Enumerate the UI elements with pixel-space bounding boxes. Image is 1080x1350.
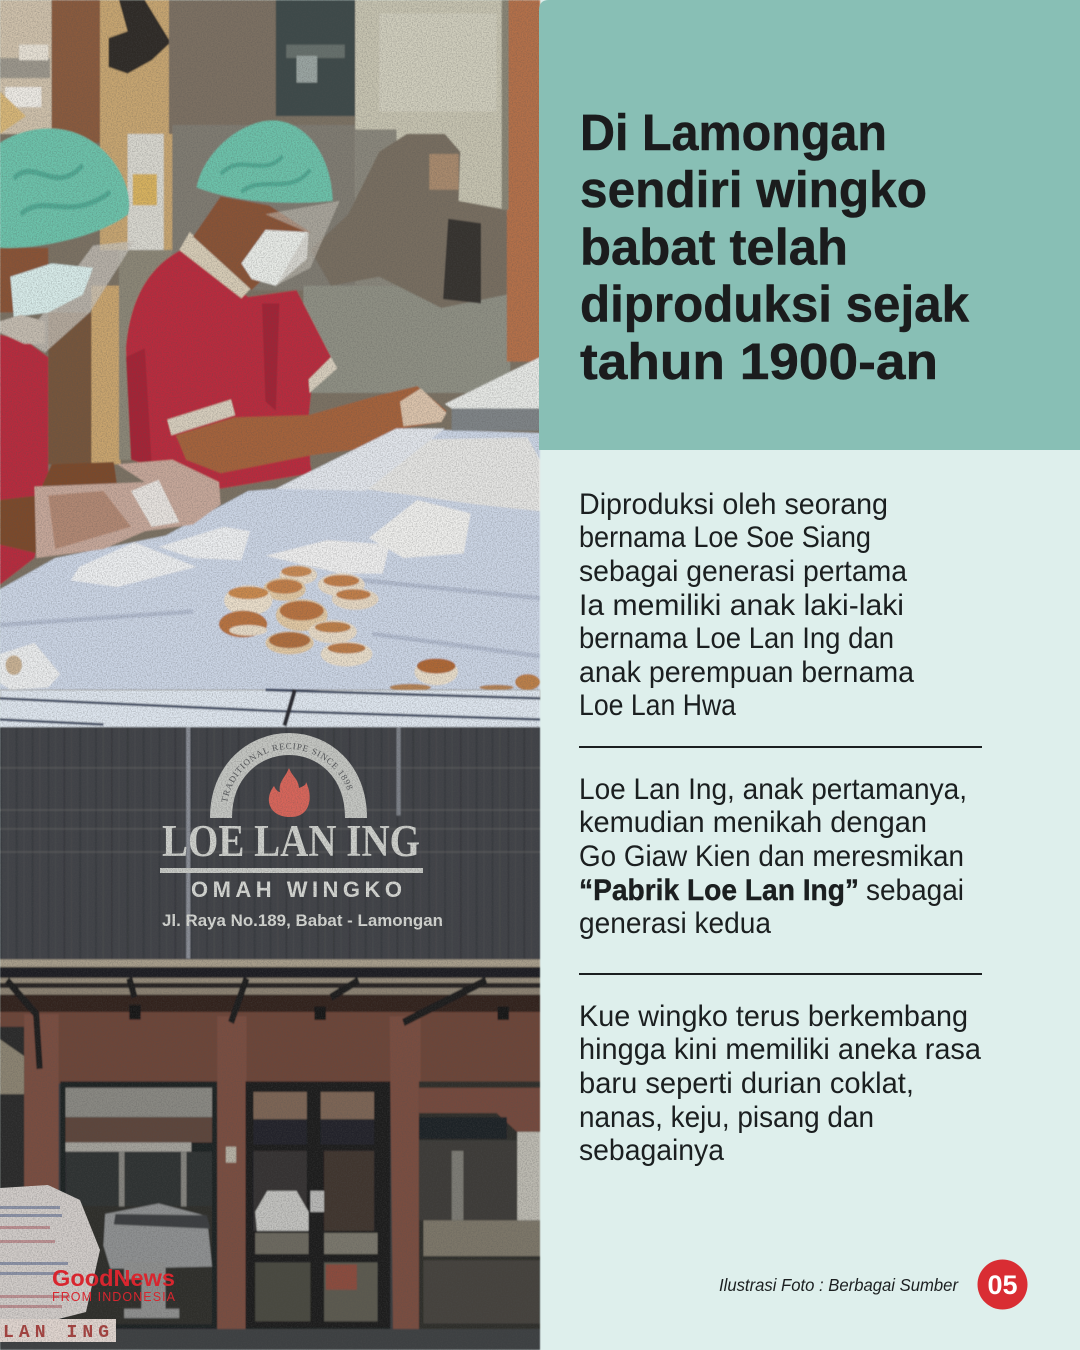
photo credit: Ilustrasi Foto : Berbagai Sumber bbox=[719, 1275, 959, 1295]
text block: first generation: Ia memiliki anak laki-laki bbox=[579, 589, 904, 622]
cakes bbox=[6, 565, 540, 691]
sign: omah wingko: OMAH WINGKO bbox=[191, 877, 402, 902]
text block: new flavours: hingga kini memiliki aneka rasa bbox=[579, 1033, 981, 1066]
brackets bbox=[7, 978, 486, 1069]
left worker bbox=[0, 335, 48, 585]
text block: second generation: generasi kedua bbox=[579, 907, 771, 940]
heading bbox=[580, 104, 970, 390]
text block: first generation: sebagai generasi pertama bbox=[579, 555, 907, 588]
left window bbox=[60, 1081, 217, 1330]
heading: diproduksi sejak bbox=[580, 276, 970, 332]
photo: Loe Lan Ing shop front bbox=[0, 0, 541, 1350]
text block: new flavours: Kue wingko terus berkembang bbox=[579, 1000, 968, 1033]
page number badge bbox=[978, 1260, 1028, 1310]
road bbox=[0, 1329, 540, 1350]
awning bbox=[0, 959, 540, 968]
reflected car bbox=[103, 1203, 212, 1269]
text block: second generation: “Pabrik Loe Lan Ing” bbox=[579, 874, 859, 907]
photo grain bbox=[0, 0, 539, 1350]
photo: workers making wingko bbox=[0, 0, 540, 700]
page number badge: 05 bbox=[987, 1270, 1018, 1300]
brick wall bbox=[0, 1012, 540, 1084]
heading: sendiri wingko bbox=[580, 161, 927, 218]
pillar and door bbox=[217, 1016, 247, 1332]
table creases bbox=[0, 580, 540, 656]
text block: first generation bbox=[579, 488, 914, 722]
napkins bbox=[71, 542, 197, 587]
panel: heading background bbox=[539, 0, 1080, 450]
text block: second generation bbox=[579, 773, 967, 940]
right pillar and window bbox=[390, 1016, 429, 1332]
text block: second generation: sebagai bbox=[866, 874, 964, 907]
logo: GoodNews from Indonesia bbox=[52, 1265, 176, 1304]
text block: first generation: bernama Loe Lan Ing dan bbox=[579, 622, 894, 655]
heading: babat telah bbox=[580, 218, 848, 276]
sign: address: Jl. Raya No.189, Babat - Lamongan bbox=[162, 911, 443, 930]
tray bbox=[445, 357, 540, 408]
sign: divider bbox=[160, 868, 423, 873]
sign: arch logo: TRADITIONAL RECIPE SINCE 1898 bbox=[221, 743, 352, 802]
text block: new flavours: sebagainya bbox=[579, 1134, 724, 1167]
text block: new flavours: baru seperti durian coklat, bbox=[579, 1067, 914, 1100]
table bbox=[0, 429, 540, 690]
white stone sign bbox=[0, 1185, 116, 1343]
text block: first generation: bernama Loe Soe Siang bbox=[579, 521, 871, 554]
text block: second generation: Go Giaw Kien dan meresmikan bbox=[579, 840, 964, 873]
text block: first generation: Loe Lan Hwa bbox=[579, 689, 736, 722]
text block: second generation: Loe Lan Ing, anak pertamanya, bbox=[579, 773, 967, 806]
icon: flame bbox=[269, 768, 310, 817]
text block: second generation: kemudian menikah dengan bbox=[579, 806, 927, 839]
text block: first generation: anak perempuan bernama bbox=[579, 656, 914, 689]
text block: new flavours bbox=[579, 1000, 981, 1167]
text block: first generation: Diproduksi oleh seorang bbox=[579, 488, 888, 521]
logo: GoodNews from Indonesia: GoodNews bbox=[52, 1265, 175, 1291]
logo: GoodNews from Indonesia: FROM INDONESIA bbox=[52, 1290, 176, 1304]
sign: brand name: LOE LAN ING bbox=[162, 816, 420, 866]
right worker shirt bbox=[126, 250, 331, 489]
heading: tahun 1900-an bbox=[580, 333, 938, 390]
sign plate: LAN ING bbox=[3, 1323, 109, 1343]
heading: Di Lamongan bbox=[580, 104, 887, 161]
text block: new flavours: nanas, keju, pisang dan bbox=[579, 1101, 874, 1134]
sign: arch logo bbox=[210, 733, 367, 818]
